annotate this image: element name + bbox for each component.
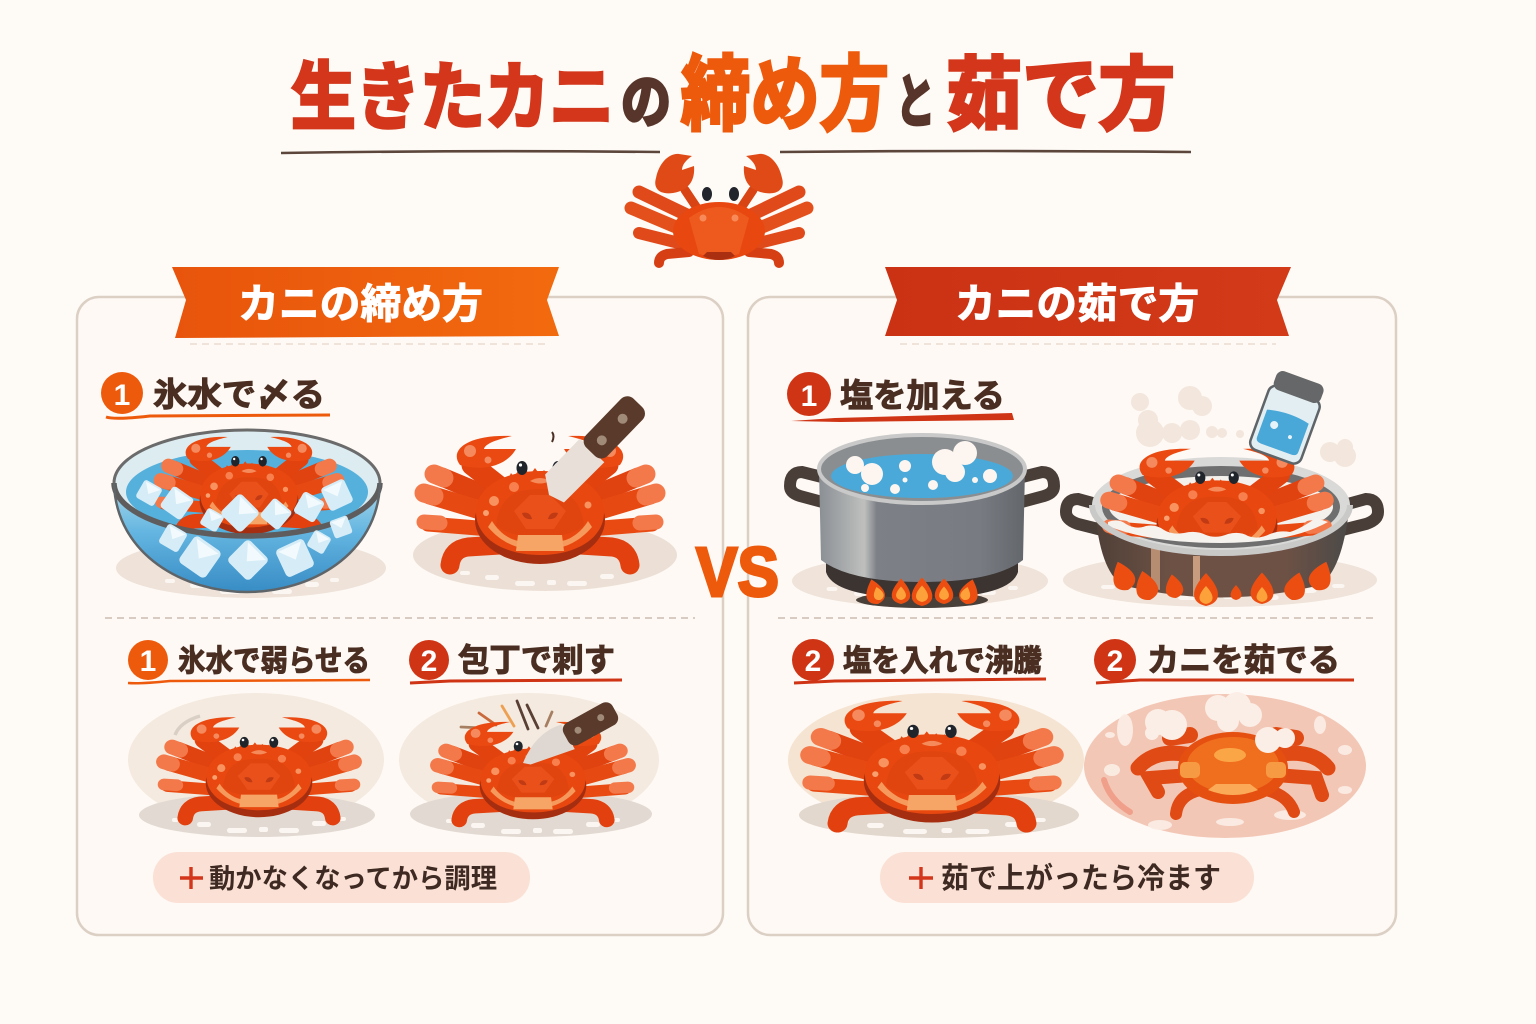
title: [291, 50, 1175, 141]
illustration: crab in ice bowl: [114, 430, 386, 598]
step heading: ice water: 1: [114, 379, 130, 412]
step heading: ice water: 氷水で〆る: [153, 376, 325, 413]
illustration: crab with small knife: [399, 693, 659, 837]
step heading: boil with salt: 塩を入れで沸騰: [843, 645, 1042, 678]
illustration: crab in pot with salt shaker: [1063, 368, 1378, 607]
step heading: boil with salt: [792, 639, 1046, 683]
step heading: ice water: [101, 372, 330, 418]
step heading: boil crab: 2: [1107, 645, 1123, 678]
icon: header crab: [631, 154, 807, 263]
title: の: [621, 70, 671, 135]
heading banner: right: [885, 267, 1291, 336]
title: 茹で方: [946, 51, 1175, 140]
callout: right note: [880, 852, 1254, 903]
illustration: large crab: [788, 693, 1084, 838]
step heading: add salt: 塩を加える: [840, 377, 1005, 414]
illustration: boiling pot: [790, 435, 1054, 608]
step heading: boil crab: カニを茹でる: [1147, 642, 1340, 678]
title: 締め方: [681, 50, 889, 141]
title: と: [896, 70, 935, 135]
step heading: boil crab: [1094, 639, 1354, 683]
step heading: weaken in ice water: [128, 640, 370, 683]
step heading: weaken in ice water: 氷水で弱らせる: [178, 645, 370, 678]
illustration: boiled crab with steam: [1084, 692, 1366, 838]
step heading: weaken in ice water: 1: [140, 645, 156, 678]
step heading: stab with knife: [409, 640, 622, 683]
callout: right note: 茹で上がったら冷ます: [941, 861, 1221, 895]
heading banner: left: カニの締め方: [238, 281, 483, 327]
step heading: add salt: 1: [801, 380, 817, 413]
VS label: VS: [696, 533, 779, 611]
step heading: stab with knife: 包丁で刺す: [458, 642, 615, 678]
step heading: add salt: [787, 372, 1014, 422]
panel: right frame: [748, 297, 1396, 935]
heading banner: left: [172, 267, 559, 338]
heading banner: right: カニの茹で方: [955, 281, 1199, 327]
illustration: weakened crab: [128, 693, 384, 837]
step heading: boil with salt: 2: [805, 645, 821, 678]
callout: left note: [153, 852, 530, 903]
illustration: knife into crab: [413, 391, 677, 591]
panel: left frame: [77, 297, 723, 935]
title: 生きたカニ: [291, 56, 614, 139]
step heading: stab with knife: 2: [421, 645, 437, 678]
callout: left note: 動かなくなってから調理: [209, 864, 497, 894]
